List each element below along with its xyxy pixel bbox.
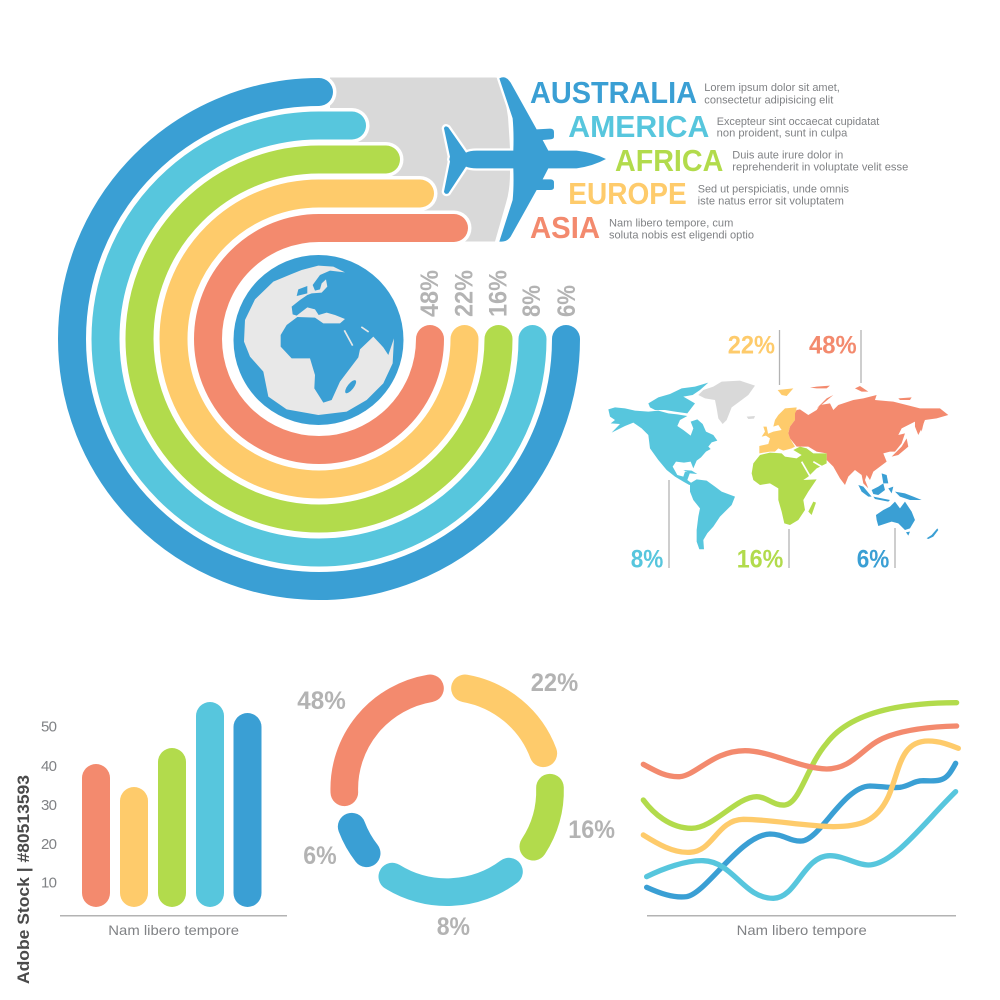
map: Asia [788, 386, 948, 488]
band: Australia blue [72, 92, 566, 586]
legend: Europe: iste natus error sit voluptatem [698, 195, 844, 207]
line chart caption: Nam libero tempore [737, 922, 867, 938]
bar y-axis labels: 40 [41, 758, 57, 775]
legend: Africa: reprehenderit in voluptate velit esse [732, 162, 908, 174]
legend: Africa: AFRICA [615, 143, 723, 178]
radial bar chart [72, 92, 566, 586]
donut segment: cyan 8% [392, 872, 509, 892]
map percent labels: 6% [857, 545, 889, 573]
bar y-axis labels: 10 [41, 875, 57, 892]
map percent labels: 8% [631, 545, 663, 573]
map: Australia and islands [858, 473, 938, 539]
rotated percent labels: 48% [416, 270, 444, 317]
donut percent labels [297, 669, 615, 941]
legend: Australia: Lorem ipsum dolor sit amet, [704, 82, 840, 94]
line chart [643, 703, 958, 938]
donut percent labels: 6% [303, 842, 337, 870]
donut percent labels: 48% [297, 687, 346, 715]
bar chart [41, 702, 287, 938]
map percent labels [631, 331, 889, 573]
donut percent labels: 16% [568, 816, 615, 844]
legend: Australia: AUSTRALIA [530, 75, 697, 110]
map leader lines [669, 330, 895, 568]
legend headings and text [530, 75, 908, 245]
donut segment: green 16% [533, 788, 550, 847]
legend: America [568, 109, 879, 144]
legend: Asia: Nam libero tempore, cum [609, 218, 733, 230]
bars [82, 702, 262, 907]
map percent labels: 22% [728, 331, 775, 359]
rotated percent labels: 8% [518, 285, 546, 317]
donut segment: blue 6% [352, 827, 367, 853]
map: Africa [752, 447, 827, 525]
donut percent labels: 22% [531, 669, 578, 697]
legend: Asia [530, 210, 754, 245]
legend: America: AMERICA [568, 109, 709, 144]
bar y-axis labels: 50 [41, 719, 57, 736]
map: Greenland [698, 381, 755, 424]
legend: Asia: ASIA [530, 210, 600, 245]
band: Africa green [140, 160, 498, 518]
donut percent labels: 8% [437, 913, 470, 941]
map percent labels: 16% [737, 545, 783, 573]
donut chart [344, 688, 550, 892]
line series [643, 703, 958, 898]
bar y-axis labels: 30 [41, 797, 57, 814]
legend: Europe [568, 176, 849, 211]
grey flight trail [330, 78, 510, 242]
rotated percent labels [416, 270, 581, 317]
legend: Africa: Duis aute irure dolor in [732, 149, 843, 161]
legend: Europe: Sed ut perspiciatis, unde omnis [698, 183, 849, 195]
band: Europe yellow [173, 194, 464, 484]
rotated percent labels: 22% [450, 270, 478, 317]
rotated percent labels: 16% [484, 270, 512, 317]
band: America cyan [105, 126, 532, 552]
icon: airplane [444, 77, 606, 242]
bar y-axis labels [41, 719, 57, 892]
rotated percent labels: 6% [553, 285, 581, 317]
legend: Asia: soluta nobis est eligendi optio [609, 229, 754, 241]
map percent labels: 48% [809, 331, 857, 359]
legend: Europe: EUROPE [568, 176, 687, 211]
legend: America: Excepteur sint occaecat cupidatat [717, 116, 879, 128]
legend: Australia [530, 75, 840, 110]
icon: globe [226, 248, 410, 432]
legend: Australia: consectetur adipisicing elit [704, 94, 833, 106]
donut segment: red 48% [344, 688, 430, 792]
bar chart caption: Nam libero tempore [108, 922, 239, 938]
world map [608, 381, 948, 549]
map: Europe [759, 388, 797, 453]
legend: Africa [615, 143, 908, 178]
map: Americas [608, 383, 735, 549]
donut segment: yellow 22% [465, 688, 543, 753]
bar y-axis labels: 20 [41, 836, 57, 853]
band: Asia red [208, 228, 454, 450]
stock id text: Adobe Stock | #80513593 [14, 775, 33, 984]
legend: America: non proident, sunt in culpa [717, 128, 848, 140]
